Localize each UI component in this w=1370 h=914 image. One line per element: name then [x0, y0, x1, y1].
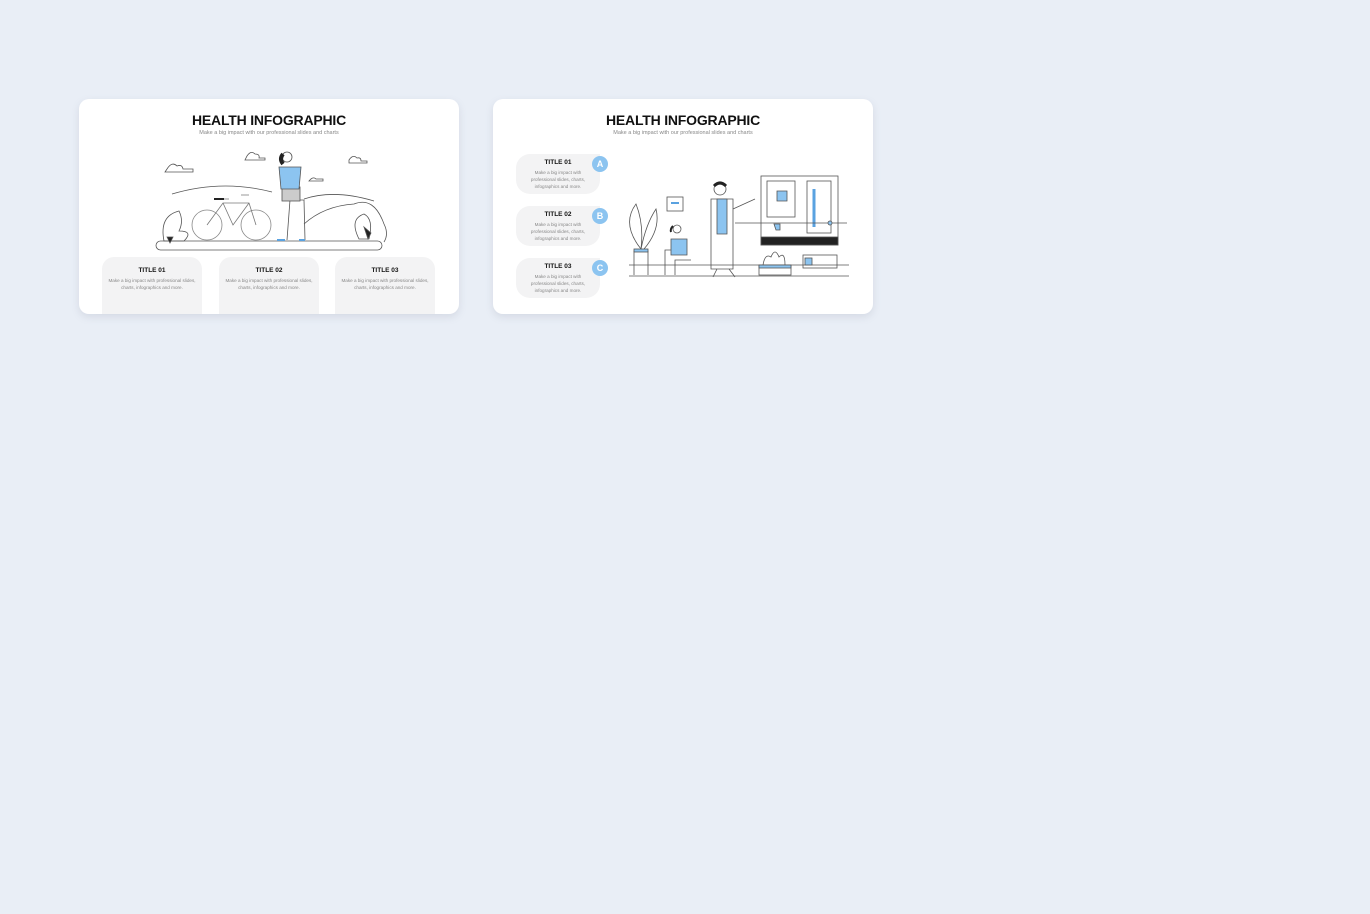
- box: title 02: Make a big impact with professional slides, charts, infographics and more.: [225, 278, 313, 290]
- item C: TITLE 03: [544, 263, 572, 270]
- item B: TITLE 02: [544, 211, 572, 218]
- box: title 03: Make a big impact with professional slides, charts, infographics and more.: [341, 278, 429, 290]
- box: title 03: [335, 257, 435, 327]
- box: title 01: Make a big impact with professional slides, charts, infographics and more.: [108, 278, 196, 290]
- subtitle: Make a big impact with our professional slides and charts: [613, 130, 753, 136]
- badge A: [592, 156, 608, 172]
- title: HEALTH INFOGRAPHIC: [606, 112, 760, 128]
- item B: [516, 206, 600, 246]
- item C: Make a big impact with professional slides, charts, infographics and more.: [531, 274, 585, 293]
- badge C: [592, 260, 608, 276]
- item B: Make a big impact with professional slides, charts, infographics and more.: [531, 222, 585, 241]
- subtitle: Make a big impact with our professional slides and charts: [199, 130, 339, 136]
- card: left slide: [79, 99, 459, 314]
- box: title 02: [219, 257, 319, 327]
- box: title 01: TITLE 01: [138, 267, 166, 274]
- box: title 01: [102, 257, 202, 327]
- illustration: woman with bicycle: [156, 152, 387, 250]
- card: right slide: [493, 99, 873, 314]
- item C: [516, 258, 600, 298]
- box: title 03: TITLE 03: [371, 267, 399, 274]
- box: title 02: TITLE 02: [255, 267, 283, 274]
- item A: TITLE 01: [544, 159, 572, 166]
- item A: Make a big impact with professional slides, charts, infographics and more.: [531, 170, 585, 189]
- illustration: dentist and child: [629, 176, 849, 278]
- title: HEALTH INFOGRAPHIC: [192, 112, 346, 128]
- badge B: B: [597, 211, 603, 221]
- badge C: C: [597, 263, 603, 273]
- item A: [516, 154, 600, 194]
- badge B: [592, 208, 608, 224]
- badge A: A: [597, 159, 603, 169]
